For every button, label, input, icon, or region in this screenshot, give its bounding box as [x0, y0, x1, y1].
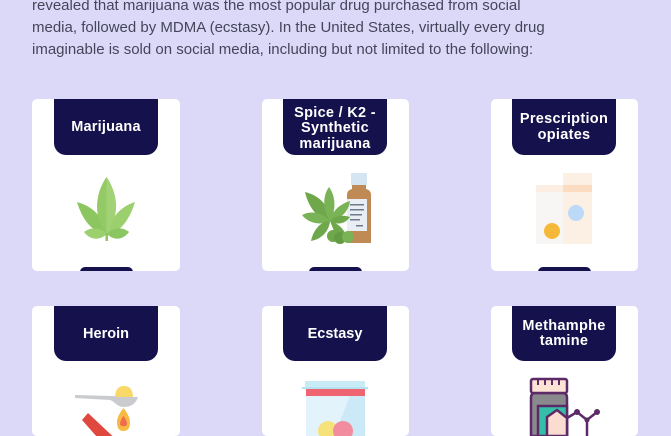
bottom tab — [309, 267, 362, 273]
heading: marijuana — [54, 99, 158, 155]
heading: prescription opiates — [512, 99, 616, 155]
panel: methamphetamine — [491, 306, 638, 436]
panel: spice — [262, 99, 409, 271]
heading: spice: Synthetic — [301, 120, 369, 136]
heading: ecstasy: Ecstasy — [308, 326, 362, 342]
panel: marijuana — [32, 99, 180, 271]
heading: ecstasy — [283, 306, 387, 361]
icon: bottle and molecule — [530, 378, 600, 436]
intro text block — [32, 0, 545, 58]
heading: prescription opiates: opiates — [538, 127, 590, 143]
intro text block: imaginable is sold on social media, including but not limited to the following: — [32, 41, 533, 58]
bottom tab — [538, 267, 591, 273]
icon: pill jar — [302, 381, 368, 436]
heading: prescription opiates: Prescription — [520, 111, 608, 127]
icon: pills — [536, 173, 592, 244]
panel: ecstasy — [262, 306, 409, 436]
heading: heroin — [54, 306, 158, 361]
heading: methamphetamine: Methamphe — [522, 318, 606, 334]
bottom tab — [80, 267, 133, 273]
heading: marijuana: Marijuana — [71, 119, 141, 135]
icon: cannabis leaf — [77, 177, 135, 241]
heading: spice: marijuana — [299, 136, 371, 152]
panel: heroin — [32, 306, 180, 436]
heading: methamphetamine: tamine — [540, 333, 588, 349]
heading: spice: Spice / K2 - — [294, 105, 376, 121]
icon: bottle and leaf — [302, 173, 371, 244]
panel: prescription opiates — [491, 99, 638, 271]
heading: methamphetamine — [512, 306, 616, 361]
heading: heroin: Heroin — [83, 326, 129, 342]
heading: spice — [283, 99, 387, 155]
icon: spoon and flame — [75, 386, 138, 436]
intro text block: media, followed by MDMA (ecstasy). In the United States, virtually every drug — [32, 19, 545, 36]
